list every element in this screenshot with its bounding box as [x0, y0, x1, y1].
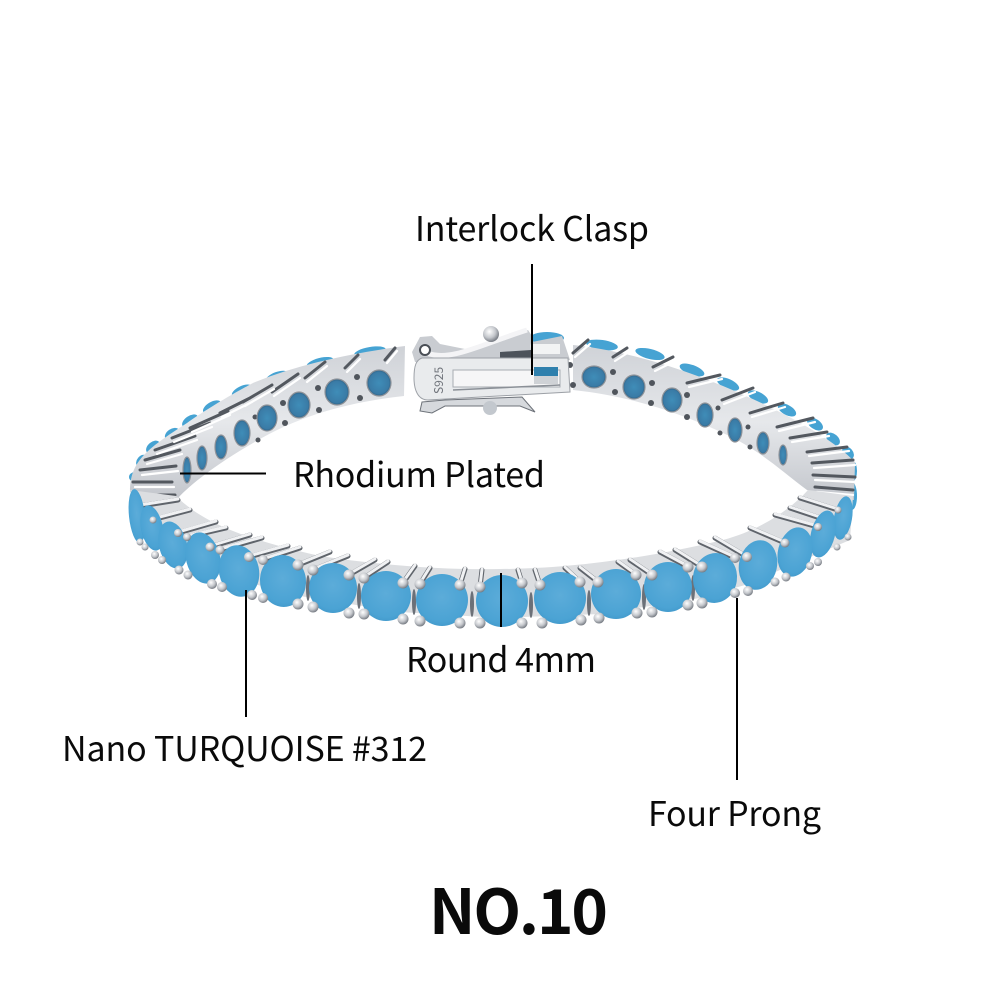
- back stone slivers: [129, 332, 857, 510]
- callout: Interlock Clasp: Interlock Clasp: [415, 202, 649, 251]
- front prong bars: [140, 498, 838, 587]
- bracelet: [126, 326, 857, 628]
- stamp S925: S925: [430, 367, 447, 394]
- clasp plate: [414, 358, 570, 400]
- clasp back mechanism: [412, 330, 570, 362]
- back band notches: [252, 362, 752, 450]
- title: NO.10: [429, 862, 608, 952]
- clasp: [412, 326, 570, 415]
- callout: Round 4mm: Round 4mm: [406, 633, 596, 682]
- front inner band: [130, 490, 853, 618]
- clasp slot: [453, 370, 560, 387]
- front dark gaps: [306, 575, 695, 618]
- clasp lower tab: [420, 397, 535, 413]
- front stones: [126, 488, 856, 627]
- callout: Four Prong: Four Prong: [648, 787, 821, 836]
- back band prong bars: [133, 340, 855, 495]
- back band silver: [130, 346, 405, 499]
- prong balls: [136, 506, 852, 628]
- back holes: [183, 366, 787, 483]
- callout: Nano Turquoise: Nano TURQUOISE #312: [62, 722, 427, 771]
- callout: Rhodium Plated: Rhodium Plated: [293, 448, 545, 497]
